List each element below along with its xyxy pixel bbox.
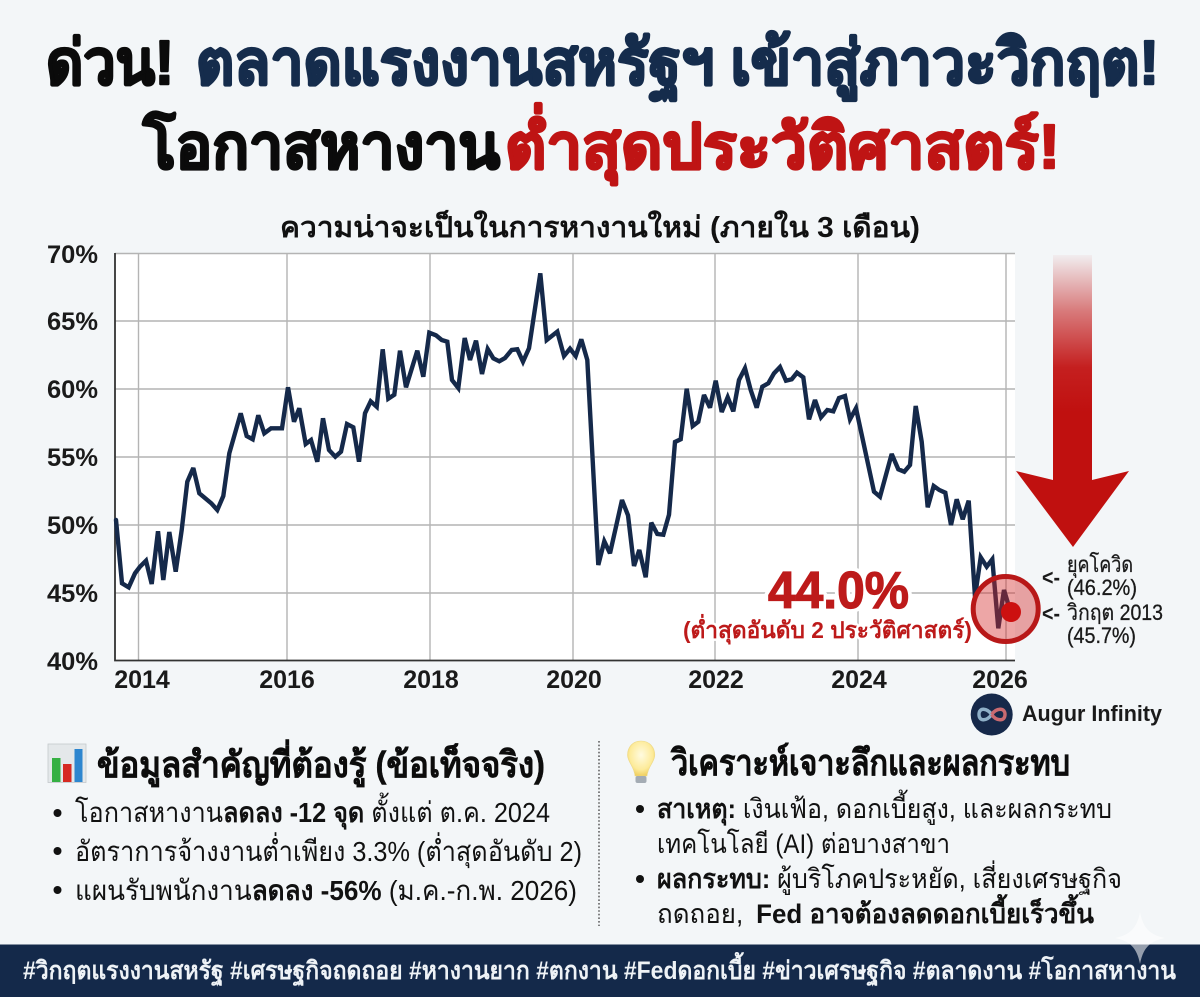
title: ต่ำสุดประวัติศาสตร์! [505,103,1060,185]
side notes: comparison lows: (45.7%) [1067,623,1136,648]
y axis labels: 40% [47,648,98,676]
callout: 44.0%: 44.0% [768,562,909,620]
panel: analysis [628,741,1122,929]
x axis labels: 2014 [114,666,170,694]
x axis labels: 2020 [546,666,602,694]
side notes: comparison lows: วิกฤต 2013 [1066,600,1163,625]
heading: analysis: วิเคราะห์เจาะลึกและผลกระทบ [670,742,1070,783]
callout: 44.0%: (ต่ำสุดอันดับ 2 ประวัติศาสตร์) [683,613,972,645]
bullet list: analysis: เทคโนโลยี (AI) ต่อบางสาขา [657,829,950,859]
side notes: comparison lows: ยุคโควิด [1067,552,1133,578]
title [46,29,1159,185]
callout: low marker dot [1001,602,1021,622]
bullet list: key facts [54,792,582,906]
y axis labels: 70% [47,241,98,269]
data line [116,273,1010,628]
x axis labels: 2022 [688,666,744,694]
title: ด่วน! [46,29,174,98]
title: ตลาดแรงงานสหรัฐฯ เข้าสู่ภาวะวิกฤต! [196,29,1159,103]
x axis labels: 2026 [972,666,1028,694]
logo: Augur Infinity [971,694,1163,736]
logo: Augur Infinity: Augur Infinity [1022,701,1163,726]
callout: low marker ring [973,576,1038,642]
x axis labels [114,666,1028,694]
chart title: ความน่าจะเป็นในการหางานใหม่ (ภายใน 3 เดือน) [280,209,920,244]
bullet list: key facts: อัตราการจ้างงานต่ำเพียง 3.3% (ต่ำสุดอันดับ 2) [75,832,582,869]
callout: 44.0%: 44.0% [768,562,909,620]
bullet list: analysis: สาเหตุ: เงินเฟ้อ, ดอกเบี้ยสูง, และผลกระทบ [657,789,1112,826]
y axis labels: 50% [47,512,98,540]
bullet list: analysis: ผลกระทบ: ผู้บริโภคประหยัด, เสี่ยงเศรษฐกิจ [657,860,1122,895]
icon: sparkle watermark [1115,912,1165,964]
y axis labels: 45% [47,580,98,608]
arrow: large red downward [1016,255,1129,547]
side notes: comparison lows: (46.2%) [1067,575,1137,600]
x axis labels: 2024 [831,666,887,694]
y axis labels: 55% [47,444,98,472]
heading: key facts: ข้อมูลสำคัญที่ต้องรู้ (ข้อเท็จจริง) [97,739,545,788]
bullet list: analysis: ถดถอย, Fed อาจต้องลดดอกเบี้ยเร็วขึ้น [657,893,1095,929]
bullet list: key facts: โอกาสหางานลดลง -12 จุด ตั้งแต่ ต.ค. 2024 [75,792,550,830]
side notes: comparison lows: <- [1042,565,1060,590]
bullet list: analysis [636,789,1122,929]
panel: key facts [48,739,582,906]
bullet list: key facts: แผนรับพนักงานลดลง -56% (ม.ค.-ก.พ. 2026) [75,875,577,906]
icon: bar chart [48,744,86,782]
title: โอกาสหางาน [142,110,500,182]
y axis labels: 65% [47,308,98,336]
icon: light bulb [628,741,655,783]
side notes: comparison lows [1042,552,1163,648]
x axis labels: 2016 [259,666,315,694]
footer band: hashtags [0,944,1200,997]
side notes: comparison lows: <- [1042,601,1060,626]
y axis labels: 60% [47,376,98,404]
line chart [47,241,1038,694]
x axis labels: 2018 [403,666,459,694]
y axis labels [47,241,98,676]
callout: 44.0% [683,562,972,645]
